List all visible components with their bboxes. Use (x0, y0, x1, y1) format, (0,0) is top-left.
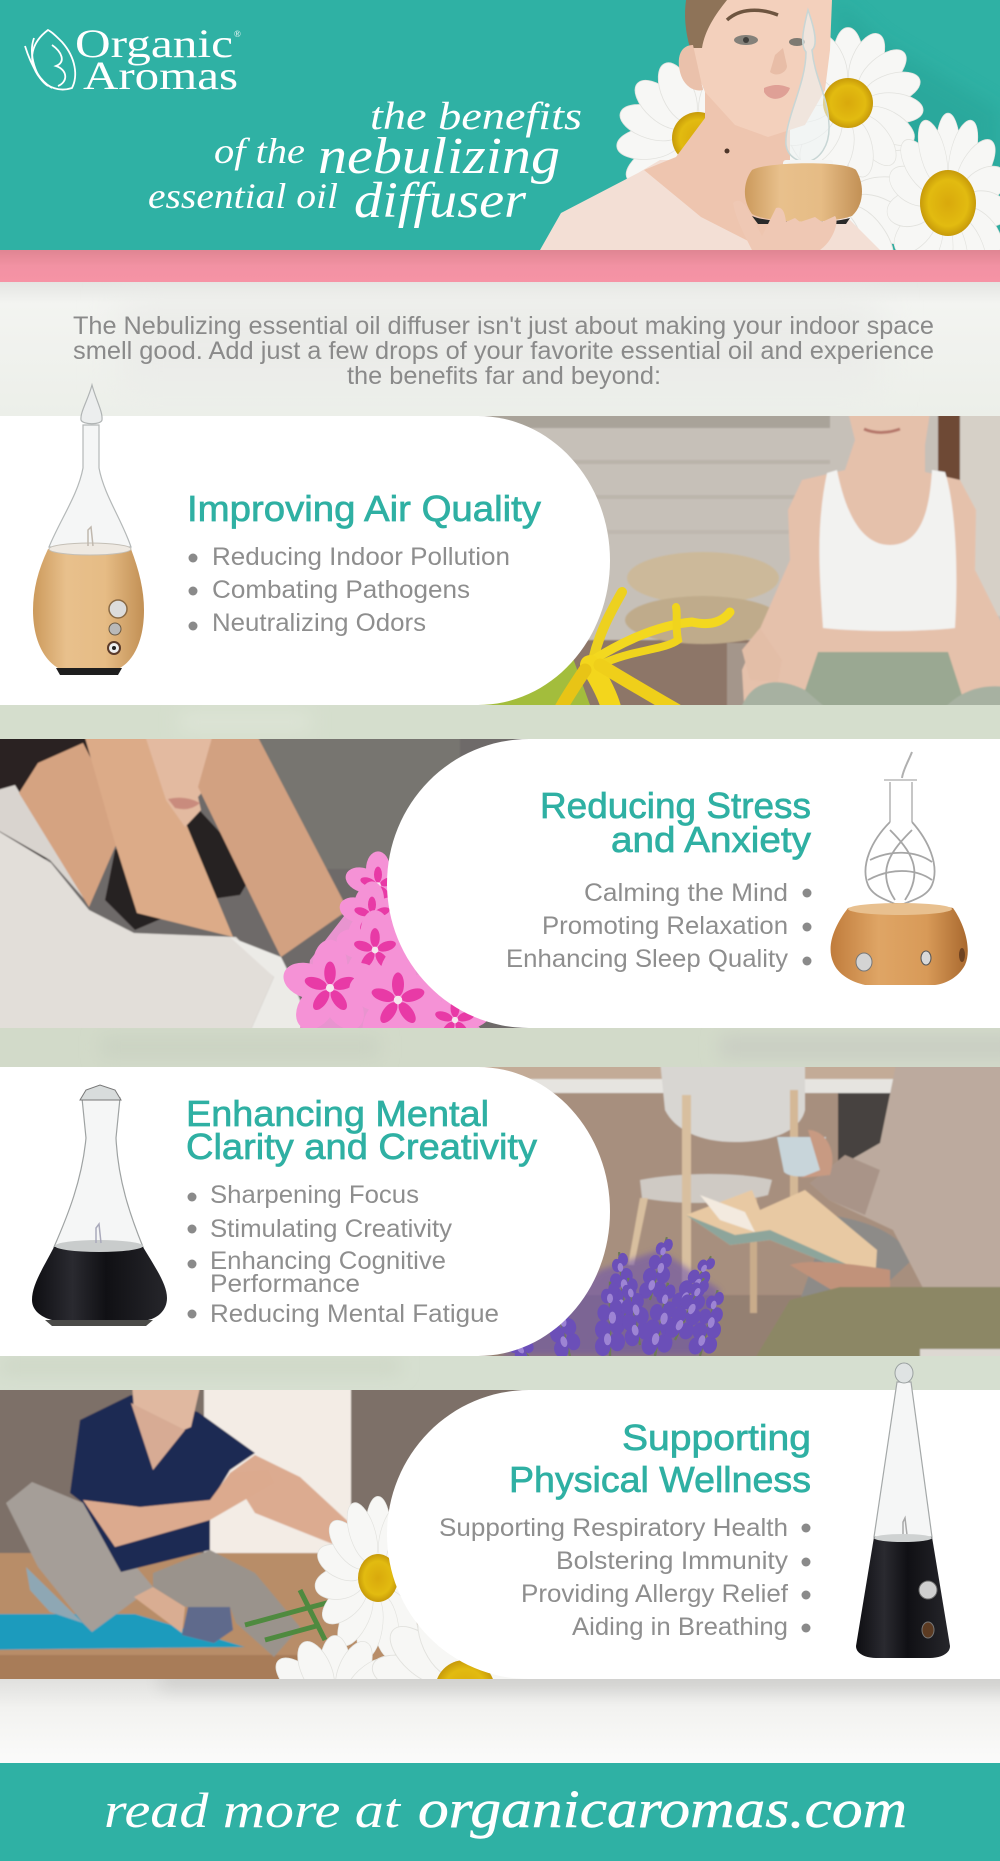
daisies and sprig (244, 1496, 528, 1679)
bullet list: Performance (210, 1270, 360, 1298)
panel: supporting physical wellness (0, 1362, 1000, 1679)
logo: Aromas (83, 53, 238, 98)
bullet list: Supporting Respiratory Health (439, 1514, 788, 1542)
white pill (387, 739, 1000, 1028)
pink flowers (284, 851, 486, 1028)
title: diffuser (354, 173, 526, 229)
heading: Improving Air Quality (187, 488, 541, 529)
bullet list (188, 1181, 499, 1328)
wood base (745, 163, 862, 224)
bullet list: Stimulating Creativity (210, 1215, 453, 1243)
title (148, 95, 582, 229)
intro text: smell good. Add just a few drops of your favorite essential oil and experience (73, 337, 934, 365)
heading: Reducing Stress (540, 785, 811, 826)
bullet list (506, 879, 812, 973)
bullet list: Aiding in Breathing (572, 1613, 788, 1641)
logo: ® (234, 29, 241, 39)
photo: woman stretching on mat (0, 1390, 528, 1679)
heading: and Anxiety (611, 819, 811, 860)
heading: Enhancing Mental (186, 1093, 489, 1134)
icon: black cone diffuser (856, 1363, 950, 1658)
heading (540, 785, 811, 860)
bullet list: Reducing Mental Fatigue (210, 1300, 499, 1328)
title: nebulizing (318, 128, 560, 185)
heading: Clarity and Creativity (186, 1126, 537, 1167)
footer banner: organicaromas.com (418, 1779, 907, 1839)
white pill (387, 1390, 1000, 1679)
heading (186, 1093, 537, 1167)
intro text: the benefits far and beyond: (347, 362, 661, 390)
heading: Physical Wellness (509, 1459, 811, 1500)
panel: improving air quality (0, 385, 1000, 720)
lavender (502, 1237, 724, 1356)
footer banner (0, 1763, 1000, 1861)
page background bands (0, 282, 1000, 1763)
bullet list: Sharpening Focus (210, 1181, 419, 1209)
bullet list: Providing Allergy Relief (521, 1580, 788, 1608)
bullet list: Enhancing Cognitive (210, 1247, 446, 1275)
bullet list: Promoting Relaxation (542, 912, 788, 940)
bullet list: Enhancing Sleep Quality (506, 945, 789, 973)
heading: Supporting (622, 1417, 811, 1458)
bullet list: Neutralizing Odors (212, 609, 426, 637)
bullet list: Bolstering Immunity (556, 1547, 789, 1575)
bullet list: Reducing Indoor Pollution (212, 543, 510, 571)
pink band (0, 250, 1000, 282)
icon: black glass diffuser (32, 1085, 167, 1326)
bullet list (439, 1514, 810, 1641)
hand (747, 208, 836, 250)
white pill (0, 416, 610, 705)
intro text: The Nebulizing essential oil diffuser isn't just about making your indoor space (73, 312, 934, 340)
footer banner: read more at (104, 1782, 401, 1838)
photo: woman meditating (479, 416, 1000, 705)
header photo: woman holding diffuser with daisies (540, 0, 1000, 250)
title: of the (214, 131, 305, 171)
header panel (0, 0, 1000, 250)
photo: stressed woman (0, 739, 528, 1028)
intro text (73, 312, 934, 390)
logo (25, 21, 241, 98)
title: essential oil (148, 176, 338, 216)
panel: enhancing mental clarity (0, 1067, 1000, 1356)
photo: woman reading with tea (479, 1067, 1000, 1356)
icon: diffuser wood and glass (33, 385, 144, 675)
icon: swirl glass diffuser (831, 752, 968, 985)
bullet list: Calming the Mind (584, 879, 788, 907)
icon: butterfly (25, 30, 75, 90)
bullet list (188, 543, 510, 637)
white pill (0, 1067, 610, 1356)
panel: reducing stress and anxiety (0, 739, 1000, 1028)
bullet list: Combating Pathogens (212, 576, 470, 604)
heading (509, 1417, 811, 1500)
yellow flower (478, 592, 730, 712)
logo: Organic (75, 21, 233, 66)
glass diffuser top (783, 10, 833, 168)
title: the benefits (370, 95, 582, 138)
